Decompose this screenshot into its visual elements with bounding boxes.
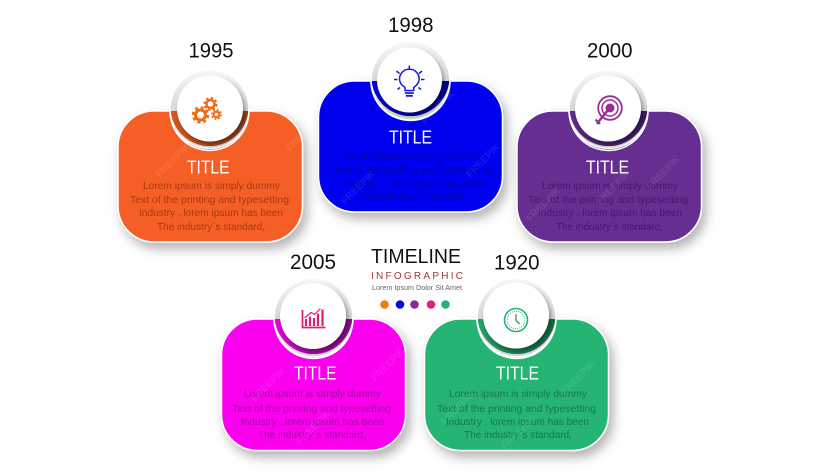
ring: green	[477, 278, 556, 358]
circle: white	[280, 283, 346, 349]
year: 1920: 1920	[494, 252, 540, 274]
watermark: FREEPIK	[439, 388, 478, 427]
body text: The industry`s standard,	[464, 429, 572, 441]
ring: orange	[170, 70, 249, 150]
year: 1995: 1995	[188, 40, 234, 62]
body text: Lorem ipsum is simply dummy	[143, 180, 281, 192]
title: TITLE	[496, 364, 539, 384]
year: 2005: 2005	[290, 251, 336, 274]
body text	[232, 388, 391, 441]
watermark	[339, 88, 503, 207]
body text: The industry`s standard,	[360, 190, 467, 202]
watermark: FREEPIK	[559, 358, 598, 397]
ring: purple	[569, 70, 648, 150]
watermark: FREEPIK	[524, 185, 563, 224]
year: 1998: 1998	[388, 14, 434, 37]
watermark: FREEPIK	[339, 168, 378, 207]
circle: white	[575, 76, 641, 142]
watermark: FREEPIK	[499, 413, 538, 452]
ring: blue	[371, 41, 450, 120]
watermark: FREEPIK	[369, 345, 408, 384]
icon: target	[596, 96, 622, 124]
circle: white	[377, 48, 442, 112]
panel: 1995	[118, 40, 323, 242]
icon: gears	[193, 98, 221, 122]
card: purple	[517, 111, 702, 242]
card: magenta	[222, 319, 406, 450]
body text: The industry`s standard,	[258, 429, 366, 441]
watermark: FREEPIK	[294, 408, 333, 447]
body text: Lorem ipsum is simply dummy	[345, 150, 483, 162]
card: blue	[318, 81, 502, 212]
circle: white	[177, 76, 243, 142]
title: TITLE	[294, 364, 336, 384]
body text: Lorem ipsum is simply dummy	[449, 388, 588, 400]
body text: Industry . lorem ipsum has been	[139, 207, 283, 219]
watermark: FREEPIK	[284, 115, 323, 154]
body text: The industry`s standard,	[556, 221, 663, 233]
body text: The industry`s standard,	[157, 221, 265, 233]
watermark	[154, 115, 323, 180]
body text	[437, 388, 596, 441]
circle: white	[483, 282, 549, 348]
watermark: FREEPIK	[594, 168, 633, 207]
title: TITLE	[586, 158, 629, 178]
body text	[528, 180, 688, 233]
card: green	[424, 319, 608, 450]
panel: 2000	[517, 40, 702, 242]
watermark: FREEPIK	[644, 153, 683, 192]
panel: 2005	[222, 251, 408, 450]
body text: Text of the printing and typesetting	[130, 194, 289, 206]
icon: clock	[504, 308, 528, 332]
year: 2000: 2000	[587, 40, 632, 62]
legend dots	[380, 300, 450, 309]
title: TITLE	[389, 128, 432, 148]
watermark	[249, 345, 408, 447]
body text: Text of the printing and typesetting	[528, 194, 688, 206]
body text: Industry . lorem ipsum has been	[446, 416, 589, 428]
panel: 1998	[318, 14, 503, 212]
body text: Industry . lorem ipsum has been	[538, 207, 682, 219]
body text	[130, 180, 289, 233]
panel: 1920	[424, 252, 608, 452]
body text: Text of the printing and typesetting	[232, 403, 391, 415]
title: TITLE	[187, 158, 230, 178]
heading: timeline infographic	[371, 245, 463, 292]
icon: light bulb	[394, 66, 424, 96]
watermark	[524, 153, 683, 224]
body text: Industry . lorem ipsum has been	[342, 178, 485, 190]
watermark: FREEPIK	[419, 88, 458, 127]
body text: Lorem ipsum is simply dummy	[542, 180, 679, 192]
watermark: FREEPIK	[464, 141, 503, 180]
body text: Text of the printing and typesetting	[437, 403, 596, 415]
body text	[333, 150, 492, 202]
tagline: Lorem Ipsum Dolor Sit Amet	[372, 283, 462, 292]
ring: magenta	[274, 278, 353, 358]
watermark: FREEPIK	[249, 365, 288, 404]
heading: TIMELINE: TIMELINE	[371, 245, 461, 268]
body text: Text of the printing and typesetting	[333, 164, 492, 176]
watermark	[439, 358, 598, 452]
watermark: FREEPIK	[154, 141, 193, 180]
card: orange	[118, 111, 302, 242]
subheading: INFOGRAPHIC: INFOGRAPHIC	[371, 271, 463, 282]
body text: Industry . lorem ipsum has been	[241, 416, 384, 428]
icon: bar chart	[302, 308, 326, 328]
body text: Lorem ipsum is simply dummy	[244, 388, 382, 400]
